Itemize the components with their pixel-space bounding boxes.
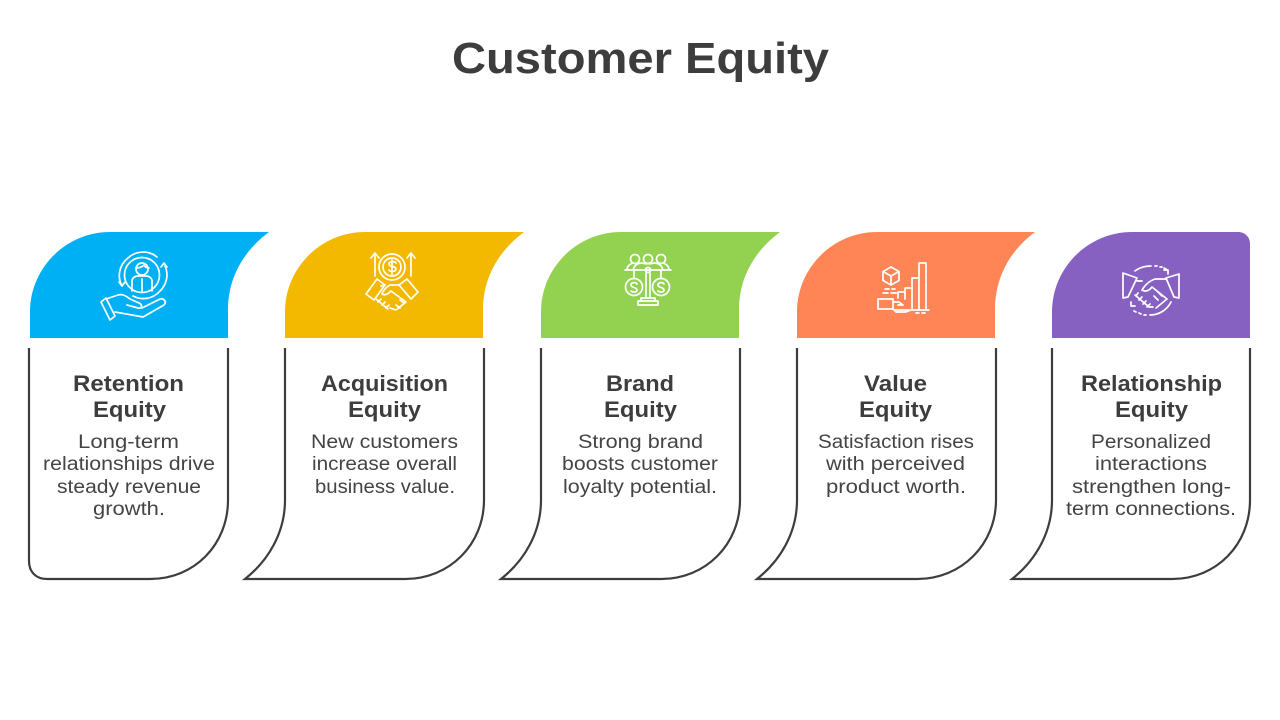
icon: coin and handshake — [366, 253, 418, 310]
description: New customers — [311, 432, 458, 453]
heading — [321, 371, 448, 422]
description — [311, 432, 458, 498]
description: loyalty potential. — [563, 477, 717, 498]
heading — [73, 371, 184, 422]
tab: brand green — [541, 232, 780, 338]
title: Customer Equity — [452, 34, 830, 83]
description — [43, 432, 215, 520]
panel: brand equity — [501, 232, 780, 579]
heading: Brand — [606, 371, 674, 396]
description: Satisfaction rises — [818, 432, 974, 453]
icon: balance scale with people — [625, 254, 671, 305]
panel: relationship equity — [1012, 232, 1250, 579]
heading: Equity — [93, 397, 167, 422]
panel: acquisition equity — [245, 232, 524, 579]
icon: handshake with cycle arrows — [1123, 266, 1179, 315]
icon: hand holding customer — [101, 252, 167, 320]
description: Long-term — [78, 432, 179, 453]
tab: acquisition yellow — [285, 232, 524, 338]
heading: Value — [864, 371, 927, 396]
description: term connections. — [1066, 499, 1236, 520]
heading: Equity — [348, 397, 422, 422]
description: product worth. — [826, 477, 966, 498]
card outline — [501, 348, 740, 579]
description: Personalized — [1091, 432, 1211, 453]
heading — [604, 371, 678, 422]
icon: product value bar chart — [878, 263, 929, 313]
description: with perceived — [825, 454, 965, 475]
description — [562, 432, 719, 498]
description: increase overall — [312, 454, 457, 475]
heading: Acquisition — [321, 371, 448, 396]
heading: Equity — [1115, 397, 1189, 422]
heading: Retention — [73, 371, 184, 396]
panel: value equity — [757, 232, 1035, 579]
tab: retention blue — [30, 232, 269, 338]
heading: Relationship — [1081, 371, 1222, 396]
panel: retention equity — [29, 232, 269, 579]
description: relationships drive — [43, 454, 215, 475]
card outline — [757, 348, 996, 579]
heading: Equity — [604, 397, 678, 422]
description: Strong brand — [578, 432, 703, 453]
description: interactions — [1095, 454, 1207, 475]
card outline — [245, 348, 484, 579]
tab: value orange — [797, 232, 1035, 338]
description: strengthen long- — [1072, 477, 1231, 498]
heading — [1081, 371, 1222, 422]
heading: Equity — [859, 397, 933, 422]
description — [818, 432, 974, 498]
card outline — [1012, 348, 1250, 579]
description: steady revenue — [57, 477, 201, 498]
card outline — [29, 348, 228, 579]
description: boosts customer — [562, 454, 719, 475]
heading — [859, 371, 933, 422]
tab: relationship purple — [1052, 232, 1250, 338]
description: business value. — [315, 477, 455, 498]
description: growth. — [93, 499, 165, 520]
description — [1066, 432, 1236, 520]
